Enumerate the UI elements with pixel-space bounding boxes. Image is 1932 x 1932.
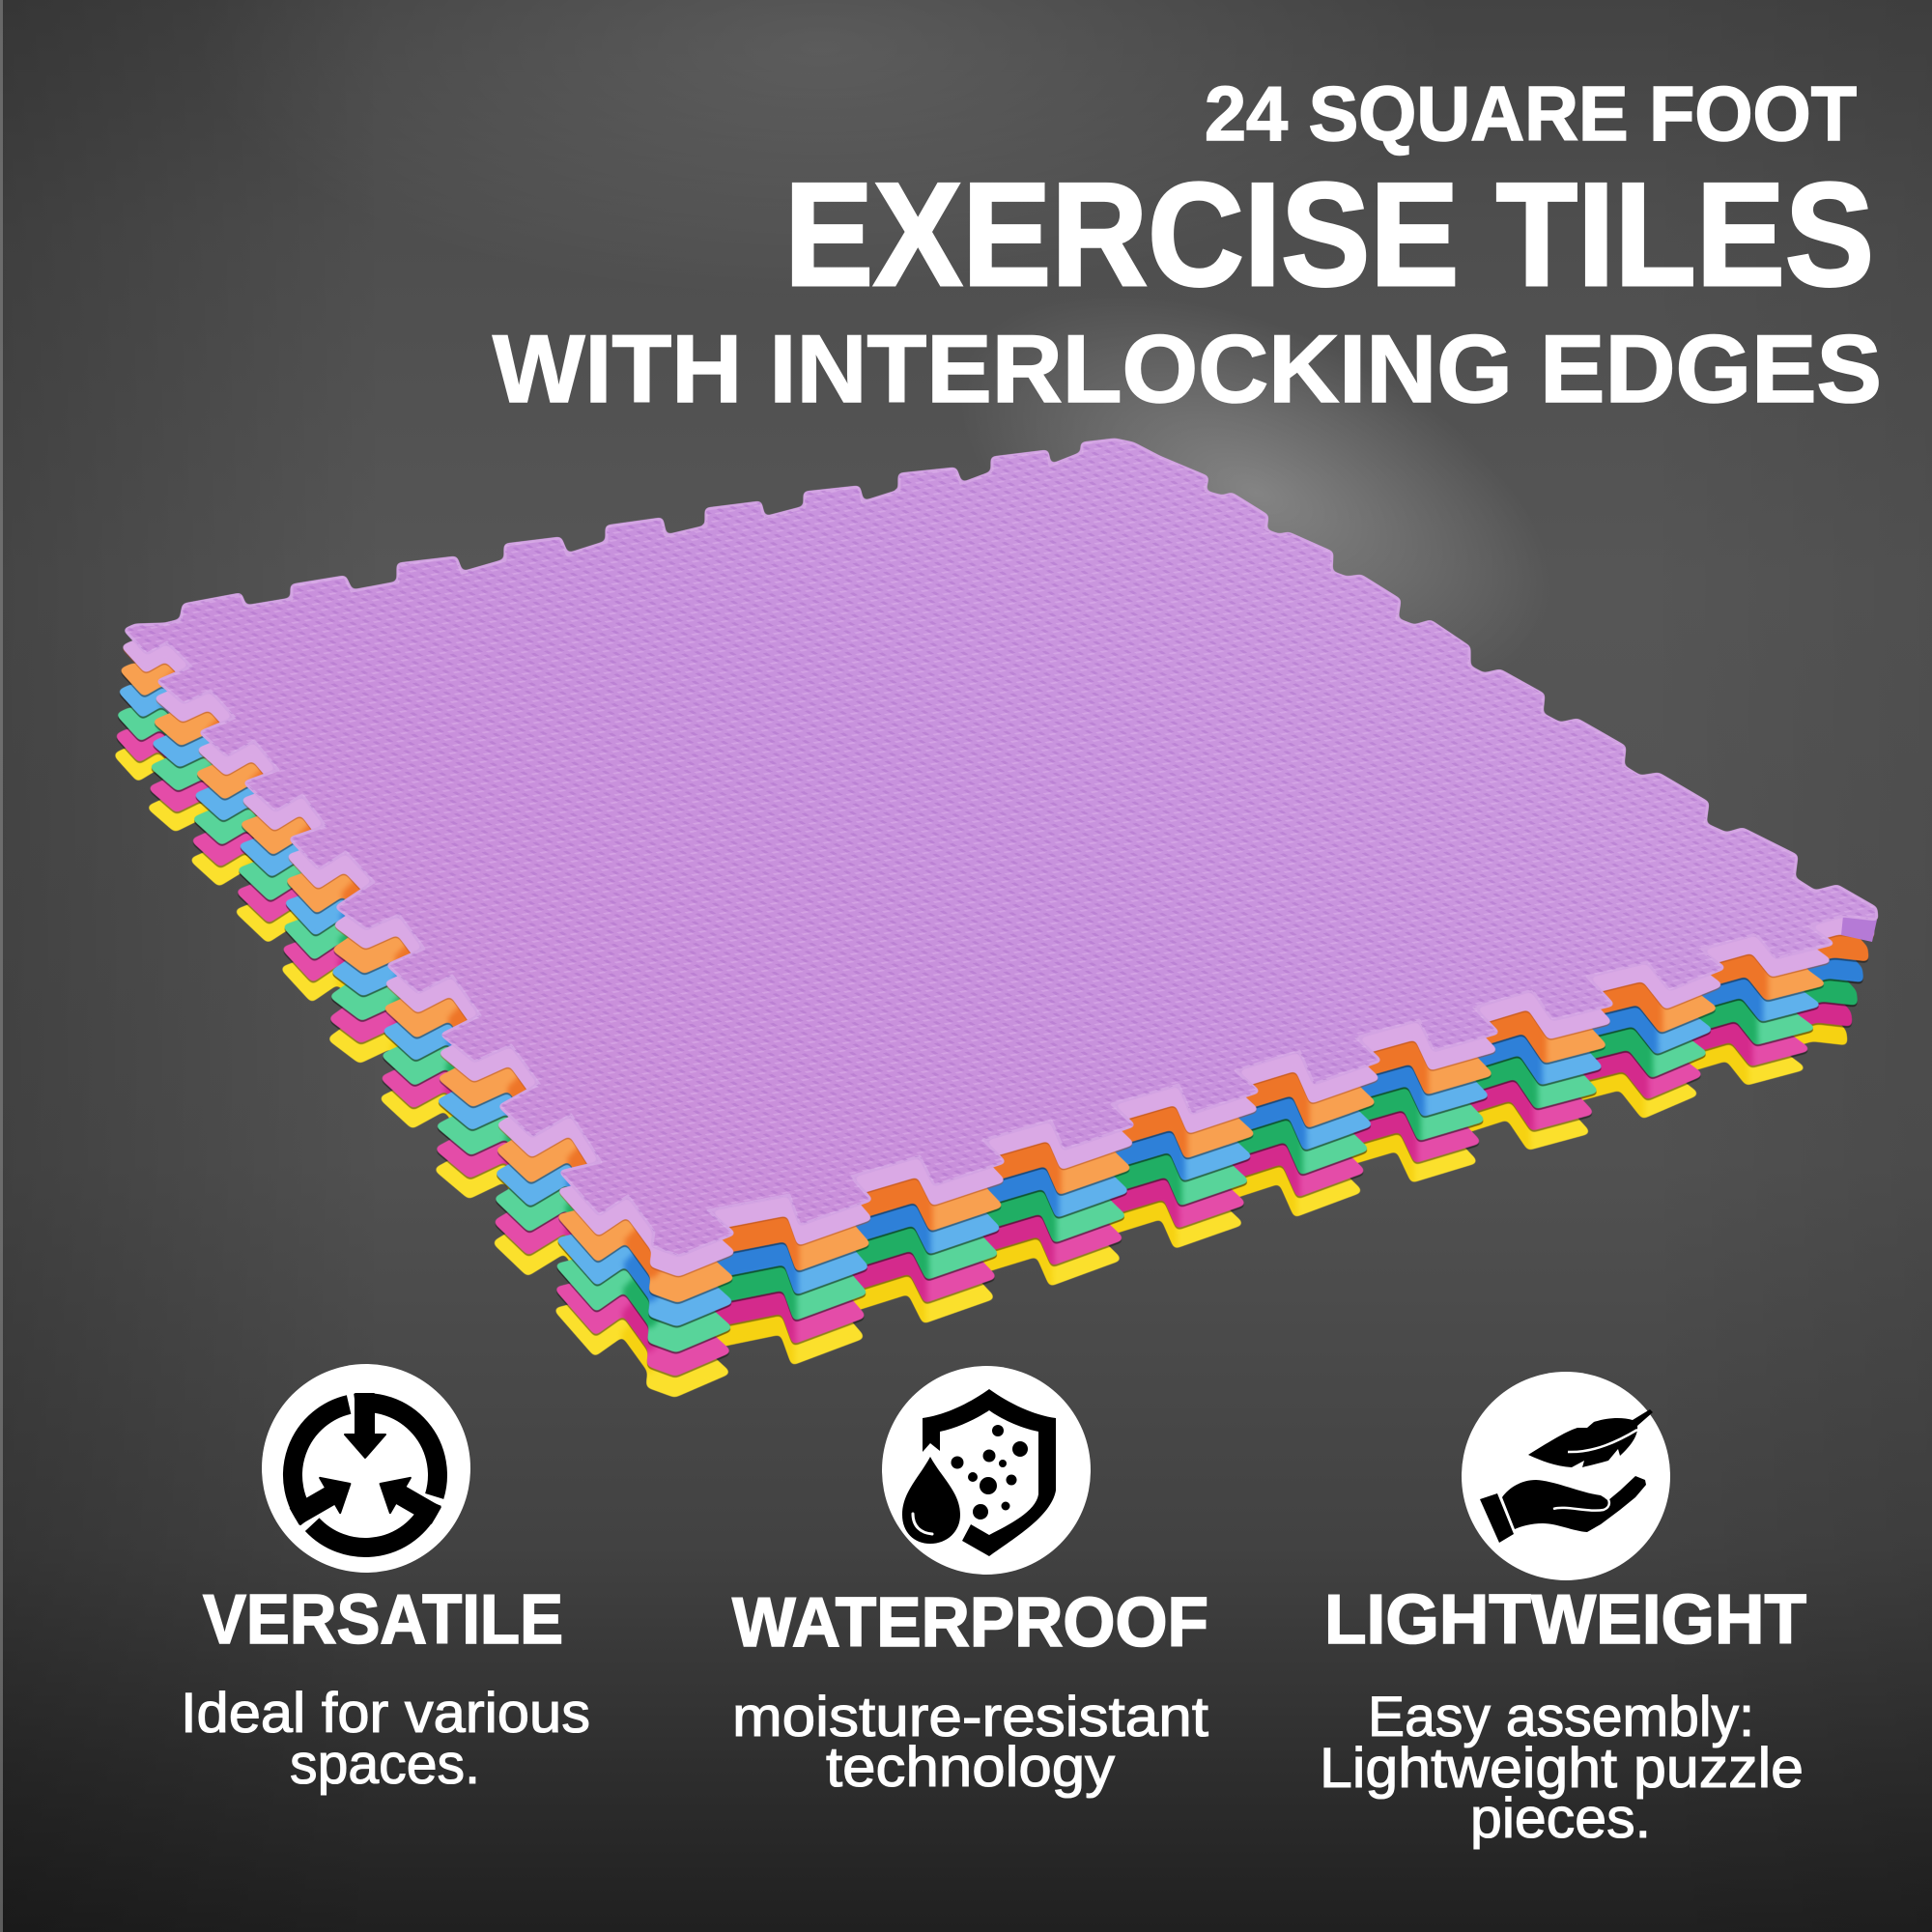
text: versatile description: spaces. [290, 1733, 480, 1796]
text: lightweight description: pieces. [1470, 1787, 1651, 1850]
icon: feather over hand [1462, 1372, 1670, 1580]
feature: versatile [181, 1364, 590, 1796]
title line: 24 square foot: 24 SQUARE FOOT [1205, 71, 1857, 156]
heading: waterproof: WATERPROOF [732, 1584, 1208, 1662]
layer: magenta [113, 532, 1857, 1377]
text: versatile description [181, 1682, 590, 1796]
top surface [125, 440, 1877, 1256]
text: lightweight description [1320, 1686, 1804, 1850]
text: versatile description: Ideal for various [181, 1682, 590, 1745]
heading: lightweight: LIGHTWEIGHT [1324, 1581, 1806, 1659]
layer: yellow [111, 550, 1853, 1399]
text: waterproof description: technology [826, 1736, 1115, 1799]
purple corner wall [1841, 916, 1877, 942]
title [493, 71, 1882, 422]
icon: shield and water drop [882, 1366, 1091, 1575]
icon: recycle arrows [262, 1364, 470, 1574]
text: lightweight description: Easy assembly: [1368, 1686, 1754, 1748]
heading: versatile: VERSATILE [203, 1581, 563, 1659]
title line: with interlocking edges: WITH INTERLOCKING EDGES [493, 315, 1882, 422]
text: waterproof description [732, 1686, 1208, 1799]
layer: green [116, 514, 1861, 1352]
text: lightweight description: Lightweight puzzle [1320, 1737, 1804, 1800]
layer: blue [118, 494, 1865, 1326]
feature: waterproof [732, 1366, 1208, 1799]
text: waterproof description: moisture-resistant [732, 1686, 1208, 1748]
feature: lightweight [1320, 1372, 1806, 1850]
stacked foam puzzle mats [111, 440, 1877, 1399]
layer: purple side [123, 454, 1874, 1275]
layer: orange [121, 475, 1869, 1302]
